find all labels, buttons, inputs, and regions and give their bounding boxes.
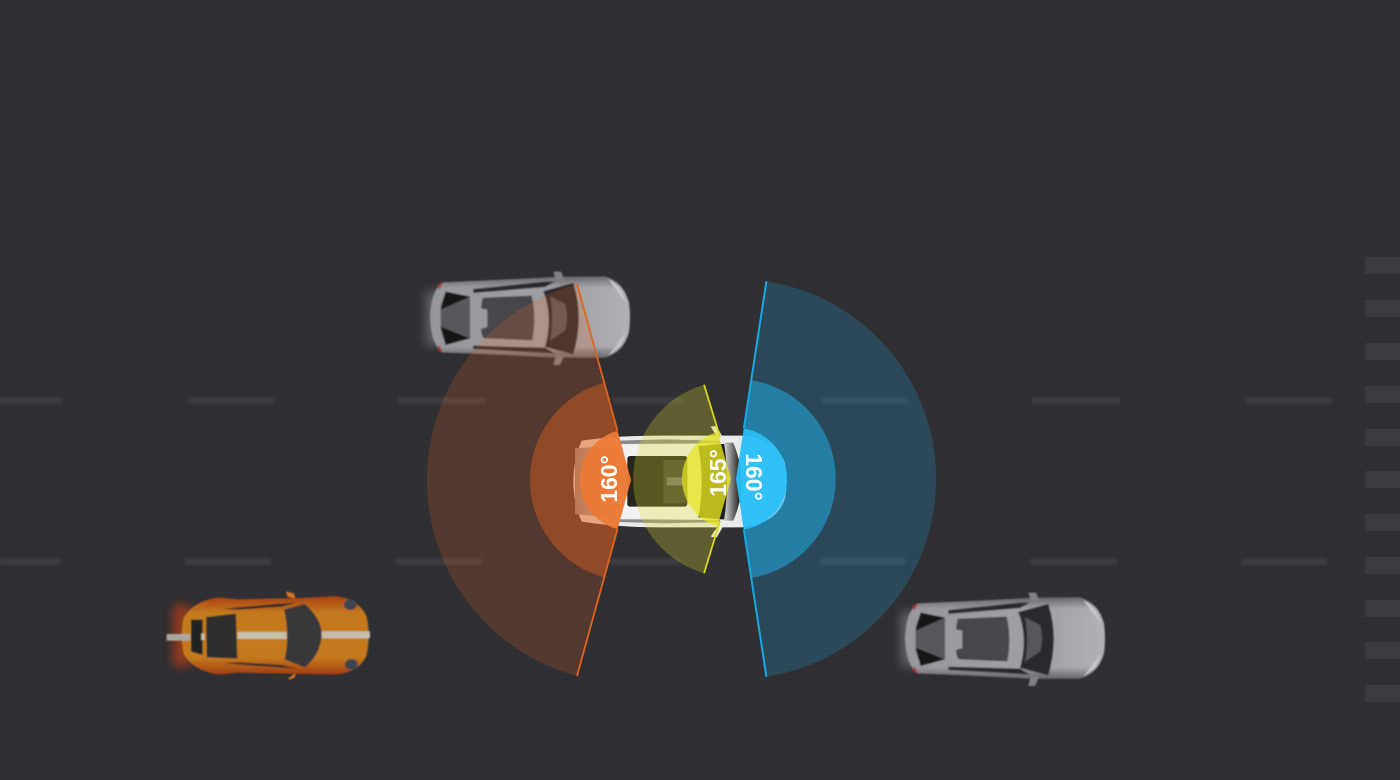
lane dashes: lower [0, 558, 1327, 565]
label: cabin 165 degrees: 165° [705, 449, 731, 497]
orange sports car [167, 591, 370, 680]
wedge: cabin camera 165 degrees (yellow) [633, 385, 731, 573]
lane dashes: upper [0, 397, 1332, 404]
wedge: front camera 160 degrees (blue) [736, 281, 936, 677]
label: rear 160 degrees: 160° [596, 455, 622, 503]
wedge: rear camera 160 degrees (orange) [427, 284, 631, 676]
grey car, upper left [426, 272, 630, 365]
label: front 160 degrees: 160° [741, 453, 767, 501]
crosswalk stripes [1365, 257, 1400, 702]
main car [573, 426, 787, 538]
grey car, lower right [901, 593, 1105, 686]
